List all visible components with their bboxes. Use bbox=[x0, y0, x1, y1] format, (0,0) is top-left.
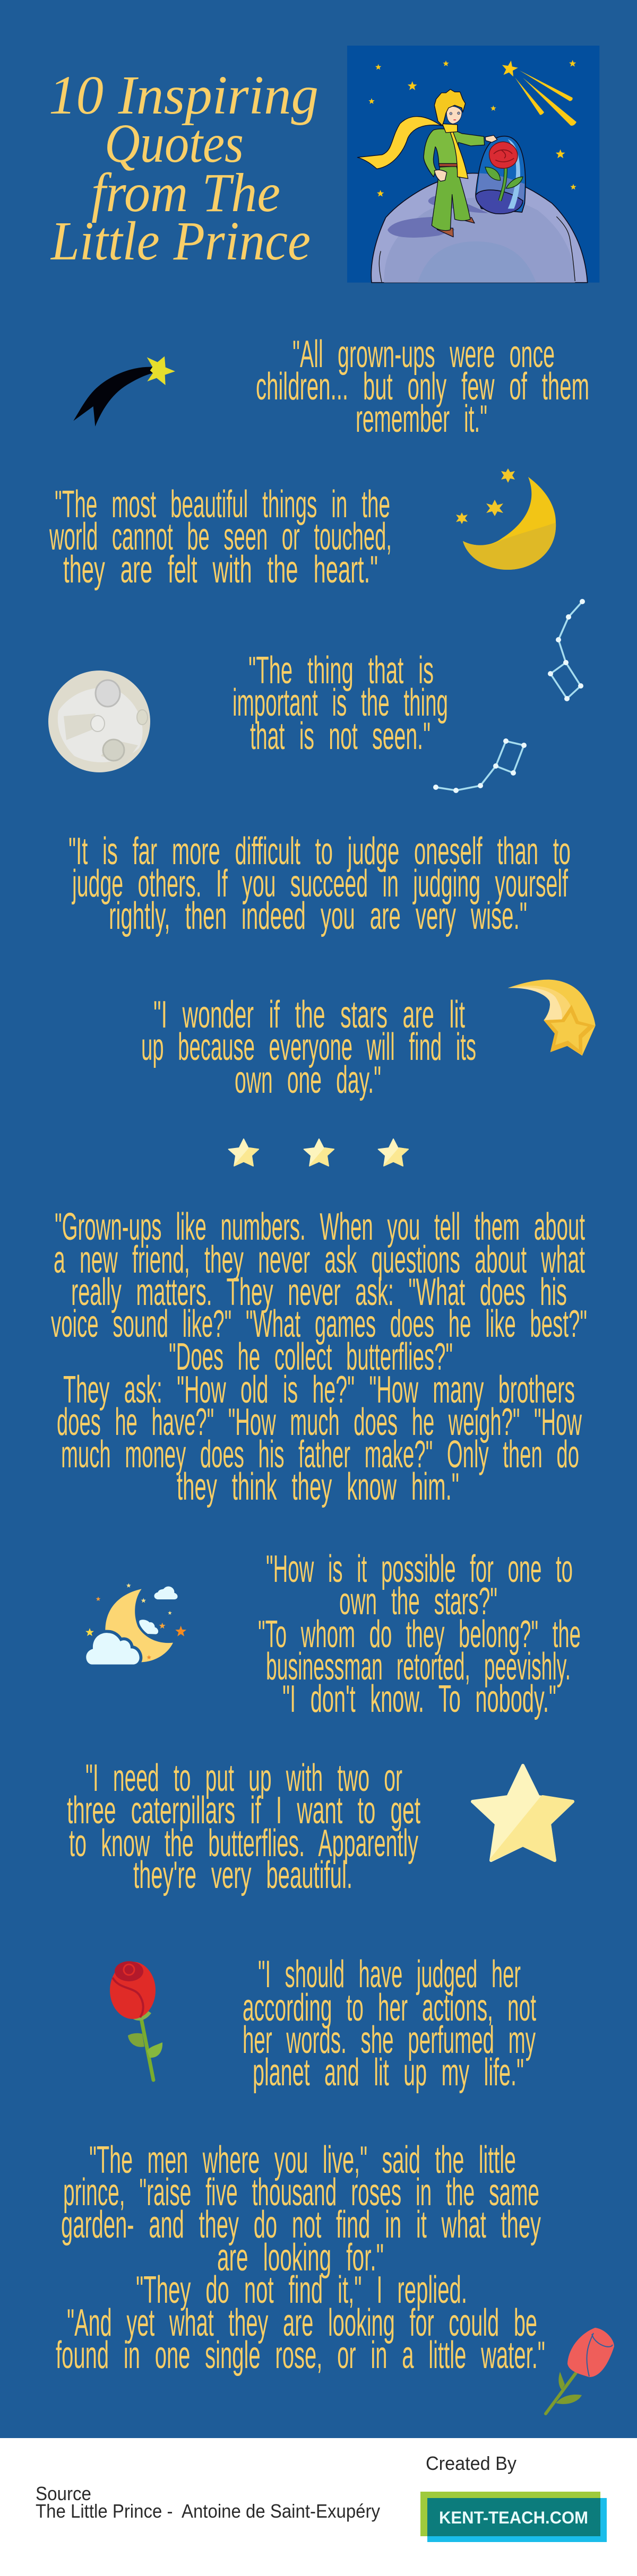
illustration: the little prince on his planet bbox=[347, 46, 599, 283]
title: Quotes bbox=[105, 113, 244, 174]
icon: red rose bbox=[110, 1961, 162, 2080]
sky stars bbox=[368, 60, 576, 197]
quote 8 bbox=[67, 1757, 420, 1896]
quote 1: remember it." bbox=[356, 398, 487, 440]
footer panel bbox=[0, 2438, 637, 2576]
created by label: Created By bbox=[426, 2452, 517, 2474]
quote 6 bbox=[51, 1206, 587, 1508]
icon: black shooting star bbox=[73, 356, 175, 427]
shooting star bbox=[501, 59, 576, 126]
icon: constellation lower bbox=[433, 738, 527, 793]
icon: full moon bbox=[48, 671, 150, 772]
icon: yellow crescent moon with stars bbox=[456, 468, 556, 570]
quote 7 bbox=[258, 1548, 581, 1720]
quote 3: important is the thing bbox=[233, 682, 448, 724]
source credit: Source bbox=[36, 2483, 91, 2504]
quote 2: they are felt with the heart." bbox=[63, 549, 378, 591]
icon: large cream star bbox=[472, 1765, 573, 1860]
title: Little Prince bbox=[50, 211, 311, 272]
icon: pink rose bbox=[546, 2328, 614, 2414]
quote 5 bbox=[141, 994, 476, 1101]
three star divider bbox=[228, 1139, 408, 1166]
quote 10: are looking for." bbox=[217, 2236, 384, 2279]
icon: constellation upper bbox=[548, 599, 585, 701]
logo: kent-teach bbox=[420, 2492, 607, 2542]
source credit: The Little Prince - Antoine de Saint-Exupéry bbox=[36, 2500, 380, 2522]
glass dome with rose bbox=[476, 136, 526, 214]
icon: moon with clouds and stars bbox=[85, 1583, 186, 1665]
title: from The bbox=[91, 162, 280, 223]
prince figure bbox=[357, 89, 497, 237]
planet bbox=[371, 173, 588, 283]
title: 10 Inspiring bbox=[49, 65, 318, 126]
quote 9 bbox=[243, 1953, 536, 2094]
quote 4 bbox=[68, 830, 571, 937]
quote 8: they're very beautiful. bbox=[133, 1854, 352, 1896]
quote 3 bbox=[233, 649, 448, 758]
quote 1 bbox=[256, 333, 589, 440]
logo: kent-teach: KENT-TEACH.COM bbox=[439, 2508, 588, 2527]
quote 3: "The thing that is bbox=[248, 649, 434, 692]
quote 5: own one day." bbox=[235, 1059, 381, 1101]
icon: crescent with star bbox=[508, 980, 596, 1056]
quote 7: own the stars?" bbox=[339, 1580, 497, 1623]
title bbox=[49, 65, 318, 272]
quote 3: that is not seen." bbox=[250, 715, 431, 758]
quote 2 bbox=[49, 483, 392, 591]
source credit bbox=[36, 2483, 380, 2522]
quote 10 bbox=[56, 2139, 545, 2377]
